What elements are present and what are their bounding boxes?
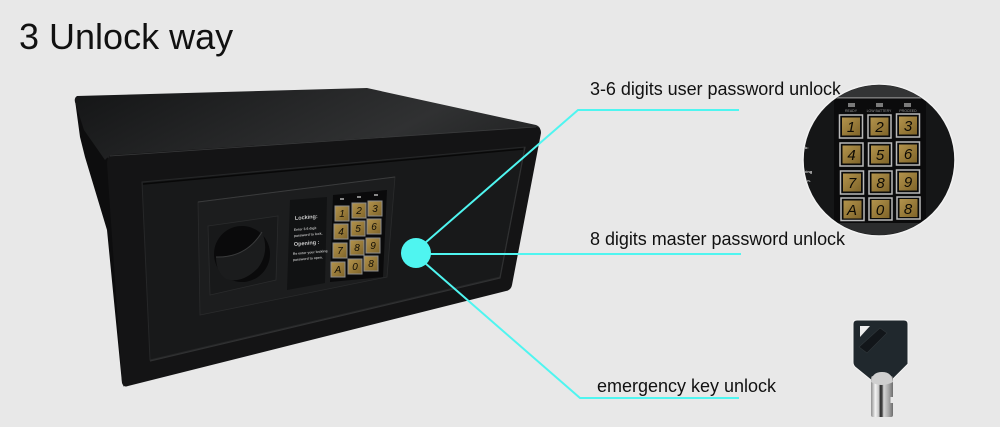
safe: handle — [210, 222, 274, 286]
inset: plate text fragments: en. — [805, 178, 811, 183]
safe: keypad: A — [334, 265, 342, 276]
label: emergency key: emergency key unlock — [597, 376, 777, 396]
inset: keys: 3 — [904, 118, 913, 135]
safe: recess bottom edge — [150, 147, 525, 361]
safe: instruction plate: password to lock. — [294, 232, 323, 238]
safe: keypad: 6 — [371, 222, 377, 233]
safe: keypad: 8 — [354, 243, 360, 254]
inset: top edge — [836, 85, 920, 98]
callout origin dot — [401, 238, 431, 268]
safe: top face — [75, 88, 540, 160]
keypad close-up inset — [800, 84, 960, 237]
inset: keys: 8 — [876, 175, 885, 192]
safe: recess top shadow — [143, 149, 523, 184]
safe: keypad: 1 — [339, 209, 345, 220]
safe: keypad — [330, 190, 387, 282]
safe: instruction plate: Enter 3-6 digit — [294, 226, 317, 232]
safe — [75, 88, 541, 387]
inset: keys: 2 — [874, 119, 884, 136]
inset: keys: 9 — [904, 174, 913, 191]
inset: keys: 8 — [904, 201, 913, 218]
inset: keys: A — [846, 202, 857, 219]
inset: keys — [840, 114, 920, 220]
safe: keypad: 4 — [338, 227, 344, 238]
inset: plate text fragments: k: — [805, 145, 809, 150]
inset: status lights — [845, 103, 916, 112]
key barrel — [871, 376, 893, 417]
callout line: emergency key — [425, 263, 739, 398]
safe: keypad: 5 — [355, 224, 361, 235]
callout line: user password — [425, 110, 739, 243]
safe: instruction plate: Opening : — [294, 240, 320, 248]
key barrel top — [871, 372, 893, 385]
safe: keypad: 2 — [355, 206, 362, 217]
inset: keys: 4 — [847, 147, 856, 164]
safe: left side — [75, 97, 124, 387]
label: master password: 8 digits master password unlock — [590, 229, 846, 249]
safe: keypad: 9 — [370, 241, 376, 252]
safe: instruction plate — [287, 197, 328, 290]
inset: keys: 7 — [848, 175, 857, 192]
label: user password: 3-6 digits user password unlock — [590, 79, 842, 99]
inset: status lights: PROCEED — [899, 109, 917, 113]
inset: keys: 0 — [876, 202, 885, 219]
callout line: master password — [428, 253, 741, 255]
safe: keypad: 3 — [372, 204, 378, 215]
safe: keypad: 0 — [352, 262, 358, 273]
safe: door recess — [142, 147, 525, 360]
inset: status lights: LOW BATTERY — [867, 109, 892, 113]
inset: plate text fragments — [804, 146, 812, 182]
safe: instruction plate: Re enter your locking — [293, 249, 328, 256]
key head slot — [859, 328, 887, 353]
inset: bottom edge — [838, 223, 919, 235]
safe: front face — [107, 127, 541, 386]
key barrel notch — [890, 397, 893, 403]
icon: emergency key — [853, 320, 908, 417]
safe: instruction plate: Locking: — [295, 214, 318, 222]
inset: keys: 1 — [847, 119, 855, 136]
inset: keys: 6 — [904, 146, 913, 163]
safe: lock panel — [198, 177, 395, 315]
safe: front top edge highlight — [110, 127, 536, 156]
title: 3 Unlock way — [19, 16, 233, 57]
safe: handle recess — [208, 216, 278, 295]
inset: status lights: READY — [845, 109, 858, 113]
safe: keypad: 8 — [368, 259, 374, 270]
safe: instruction plate: password to open. — [293, 255, 323, 262]
safe: keypad: 7 — [337, 246, 343, 257]
inset: plate text fragments: king — [804, 169, 813, 174]
inset: keys: 5 — [876, 147, 885, 164]
key head window — [860, 326, 870, 337]
key head — [853, 320, 908, 380]
